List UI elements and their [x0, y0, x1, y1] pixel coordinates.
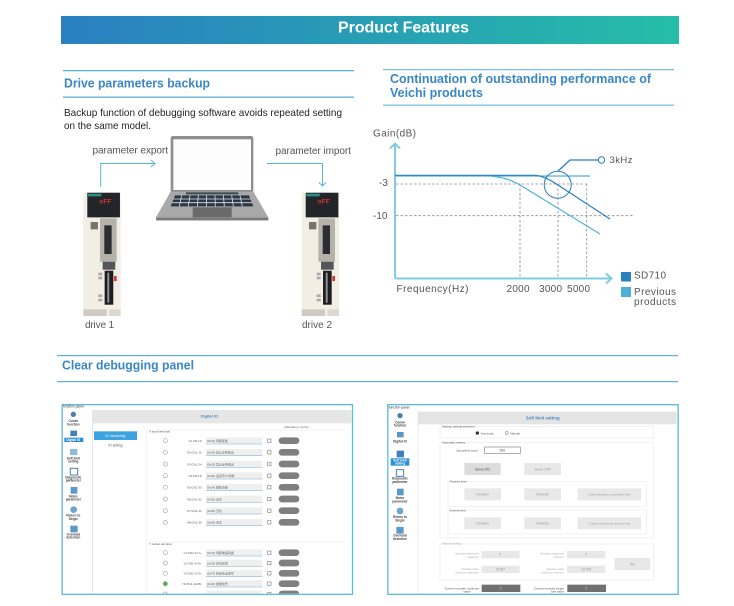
sidebar icons: [391, 413, 409, 541]
heading: continuation of performance: Veichi products: [390, 85, 483, 100]
sidebar icons: Comm: [68, 419, 78, 423]
tick labels: 2000: [506, 284, 530, 295]
setting groups: [440, 427, 653, 580]
title banner: [61, 16, 679, 44]
panel: soft limit screenshot: -32768: [581, 567, 591, 571]
sidebar icons: [64, 412, 83, 540]
icon: drive 2: oFF: [318, 199, 330, 206]
panel: digital IO screenshot: [0x04] 故障信号: [207, 581, 228, 586]
sidebar icons: function: [394, 424, 406, 428]
panel: soft limit screenshot: 32767: [496, 567, 505, 571]
sidebar icons: Overload: [393, 534, 407, 538]
icon: laptop: [156, 136, 268, 220]
panel: digital IO screenshot: IO monitoring: [105, 434, 125, 438]
sidebar icons: Soft limit: [393, 458, 408, 462]
panel: digital IO screenshot: [0x03] 禁止反转输出: [207, 461, 234, 466]
panel: soft limit screenshot: function panel: [389, 406, 410, 410]
panel: soft limit screenshot: Reverse: [536, 522, 549, 526]
heading: continuation of performance: Continuation of outstanding performance of: [390, 71, 652, 86]
sidebar icons: Return to: [66, 514, 80, 518]
curve: previous products: [395, 176, 600, 234]
panel: soft limit screenshot: Automatic setting: [442, 441, 465, 445]
panel: soft limit screenshot: Current encoder multi-turn: [444, 586, 480, 590]
panel: soft limit screenshot: Absolute single-turn: [541, 552, 565, 556]
panel: digital IO screenshot: [0x05] 定位完成: [207, 560, 228, 565]
panel: digital IO screenshot: X6:CN1-32: [187, 497, 202, 501]
panel: soft limit screenshot: Positive limit: [450, 480, 466, 484]
panel: digital IO screenshot: X4:CN1-8: [189, 474, 202, 478]
panel: digital IO screenshot: [0x02] 禁止正转输出: [207, 450, 234, 455]
panel: digital IO screenshot: Mandatory control: [284, 425, 309, 429]
dashed guide lines: [396, 184, 633, 278]
panel: digital IO screenshot: [0x00] 无功: [207, 520, 222, 525]
panel: soft limit screenshot: Servo OFF: [535, 467, 551, 471]
panel: digital IO screenshot: X5:CN1-33: [187, 486, 202, 490]
panel: digital IO screenshot: Y4:CN1-14/28-: [182, 582, 202, 586]
panel: digital IO screenshot: [62, 404, 352, 597]
arrow: parameter import: [267, 164, 326, 186]
panel: soft limit screenshot: 0: [499, 553, 501, 557]
heading: drive parameters backup: Drive parameters backup: [64, 76, 210, 90]
panel: soft limit screenshot: multi-turn maximum: [455, 570, 479, 574]
sidebar icons: Single: [395, 518, 405, 522]
sidebar icons: Diagnostic: [392, 477, 408, 481]
panel: digital IO screenshot: [0x07] 转动检出信号: [207, 571, 234, 576]
panel: soft limit screenshot: maximum: [467, 555, 479, 559]
panel: soft limit screenshot: turn value: [551, 590, 564, 594]
sidebar icons: parameter: [392, 480, 408, 484]
legend: previous products: products: [634, 297, 676, 308]
icon: drive 1: [83, 193, 121, 316]
panel: digital IO screenshot: X2:CN1-10: [187, 451, 202, 455]
panel: digital IO screenshot: function panel: [63, 404, 84, 408]
curve: SD710: [395, 175, 610, 219]
panel: soft limit screenshot: Absolute value: [461, 567, 479, 571]
panel: soft limit screenshot: Current encoder single: [534, 586, 564, 590]
heading: clear debugging panel: Clear debugging panel: [62, 358, 194, 372]
panel: soft limit screenshot: Reverse: [536, 493, 549, 497]
legend: previous products: Previous: [634, 287, 676, 298]
tick labels: [506, 284, 590, 295]
sidebar icons: detection: [393, 537, 407, 541]
panel: digital IO screenshot: [0x01] 伺服准备就绪: [207, 550, 234, 555]
panel: digital IO screenshot: X8:CN1-30: [187, 521, 202, 525]
sidebar icons: Motor: [69, 494, 78, 498]
panel: soft limit screenshot: Servo ON: [475, 467, 490, 471]
buttons: [464, 463, 650, 573]
label: gain axis: Gain(dB): [373, 128, 416, 140]
panel: digital IO screenshot: Y1:CN1-6-/7+: [183, 551, 202, 555]
panel: soft limit screenshot: Manual: [510, 431, 520, 435]
panel: soft limit screenshot: 200: [500, 449, 505, 453]
tick labels: 3000: [539, 284, 562, 295]
text block: backup description: on the same model.: [64, 120, 151, 132]
panel: digital IO screenshot: [0x04] 报警清除: [207, 485, 228, 490]
panel: digital IO screenshot: Y2:CN1-4-/5+: [183, 561, 202, 565]
panel: digital IO screenshot: IO setting: [108, 443, 123, 447]
panel: soft limit screenshot: Setting method selection: [442, 425, 475, 429]
panel: soft limit screenshot: Current position to reverse limit: [589, 522, 630, 526]
panel: digital IO screenshot: Y3:CN1-2-/3+: [183, 572, 202, 576]
panel: soft limit screenshot: 0: [585, 587, 587, 591]
panel: soft limit screenshot: Absolute single-turn: [455, 552, 479, 556]
panel: soft limit screenshot: Set: [630, 562, 635, 566]
sidebar icons: Overload: [66, 532, 80, 536]
chart axes: [390, 144, 612, 284]
panel: soft limit screenshot: Current position to positive limit: [589, 493, 630, 497]
panel: soft limit screenshot: Manual setting: [442, 542, 462, 546]
sidebar icons: Digital IO: [393, 439, 407, 443]
panel: digital IO screenshot: Y output terminal: [149, 542, 172, 546]
label: parameter import: parameter import: [276, 146, 351, 157]
label: -10: -10: [373, 211, 388, 222]
text block: backup description: Backup function of debugging software avoids repeated setting: [64, 107, 342, 119]
label: drive 2: drive 2: [302, 320, 332, 331]
icon: drive 2: [302, 193, 339, 316]
sidebar icons: parameter: [66, 479, 82, 483]
panel: digital IO screenshot: [0x00] 无功: [207, 508, 222, 513]
sidebar icons: Diagnostic: [65, 475, 82, 479]
panel: soft limit screenshot: 0: [500, 587, 502, 591]
panel: soft limit screenshot: Automatic: [481, 431, 494, 435]
panel: soft limit screenshot: 0: [585, 553, 587, 557]
label: parameter export: parameter export: [92, 146, 168, 156]
panel: soft limit screenshot: Jog speed (rpm): [456, 448, 478, 452]
panel: digital IO screenshot: Digital IO: [201, 414, 218, 419]
icon: drive 1: oFF: [99, 199, 112, 206]
legend: SD710: SD710: [634, 270, 666, 282]
sidebar icons: Return to: [393, 515, 407, 519]
panel: digital IO screenshot: X3:CN1-24: [187, 462, 202, 466]
sidebar icons: function: [67, 422, 80, 426]
panel: soft limit screenshot: minimum: [553, 555, 565, 559]
sidebar icons: Comm: [395, 420, 405, 424]
panel: soft limit screenshot: Absolute value: [547, 567, 565, 571]
legend: previous products: [621, 287, 676, 308]
label: 3kHz: 3kHz: [610, 155, 633, 166]
sidebar icons: Soft limit: [67, 456, 81, 460]
panel: soft limit screenshot: multi-turn minimum: [541, 570, 565, 574]
panel: digital IO screenshot: [0x00] 速度环P/I切换: [207, 473, 235, 478]
label: -3: -3: [379, 178, 388, 189]
sidebar icons: parameter: [66, 498, 82, 502]
panel: soft limit screenshot: value: [464, 590, 471, 594]
heading: continuation of performance: [383, 69, 674, 106]
sidebar icons: setting: [68, 460, 79, 464]
panel: soft limit screenshot: Inverse limit: [450, 508, 466, 512]
chart: gain vs frequency: [373, 128, 676, 308]
panel: soft limit screenshot: Soft limit setting: [526, 415, 560, 420]
sidebar icons: Motor: [396, 496, 405, 500]
sidebar icons: Digital IO: [66, 438, 81, 442]
text block: backup description: [64, 107, 342, 132]
callout: 3kHz marker: [544, 157, 605, 198]
panel: soft limit screenshot: Forward: [476, 522, 489, 526]
title banner: Product Features: [338, 20, 469, 36]
tick labels: 5000: [567, 284, 590, 295]
panel: digital IO screenshot: [0x01] 伺服使能: [207, 438, 228, 443]
sidebar icons: setting: [395, 461, 405, 465]
label: drive 1: drive 1: [85, 320, 114, 331]
panel: digital IO screenshot: [0x00] 无功: [207, 496, 222, 501]
panel: soft limit screenshot: Forward: [476, 493, 489, 497]
panel: digital IO screenshot: X input terminal: [149, 429, 170, 433]
diagram: parameter backup flow: [83, 136, 351, 331]
sidebar icons: Single: [69, 517, 78, 521]
panel: digital IO screenshot: X7:CN1-12: [187, 509, 202, 513]
label: frequency axis: Frequency(Hz): [396, 284, 468, 295]
input rows: [163, 439, 167, 596]
panel: soft limit screenshot: [388, 405, 678, 594]
panel: digital IO screenshot: X1:CN1-9: [189, 439, 202, 443]
sidebar icons: detection: [66, 536, 80, 540]
sidebar icons: parameter: [392, 499, 408, 503]
arrow: parameter export: [101, 160, 155, 187]
